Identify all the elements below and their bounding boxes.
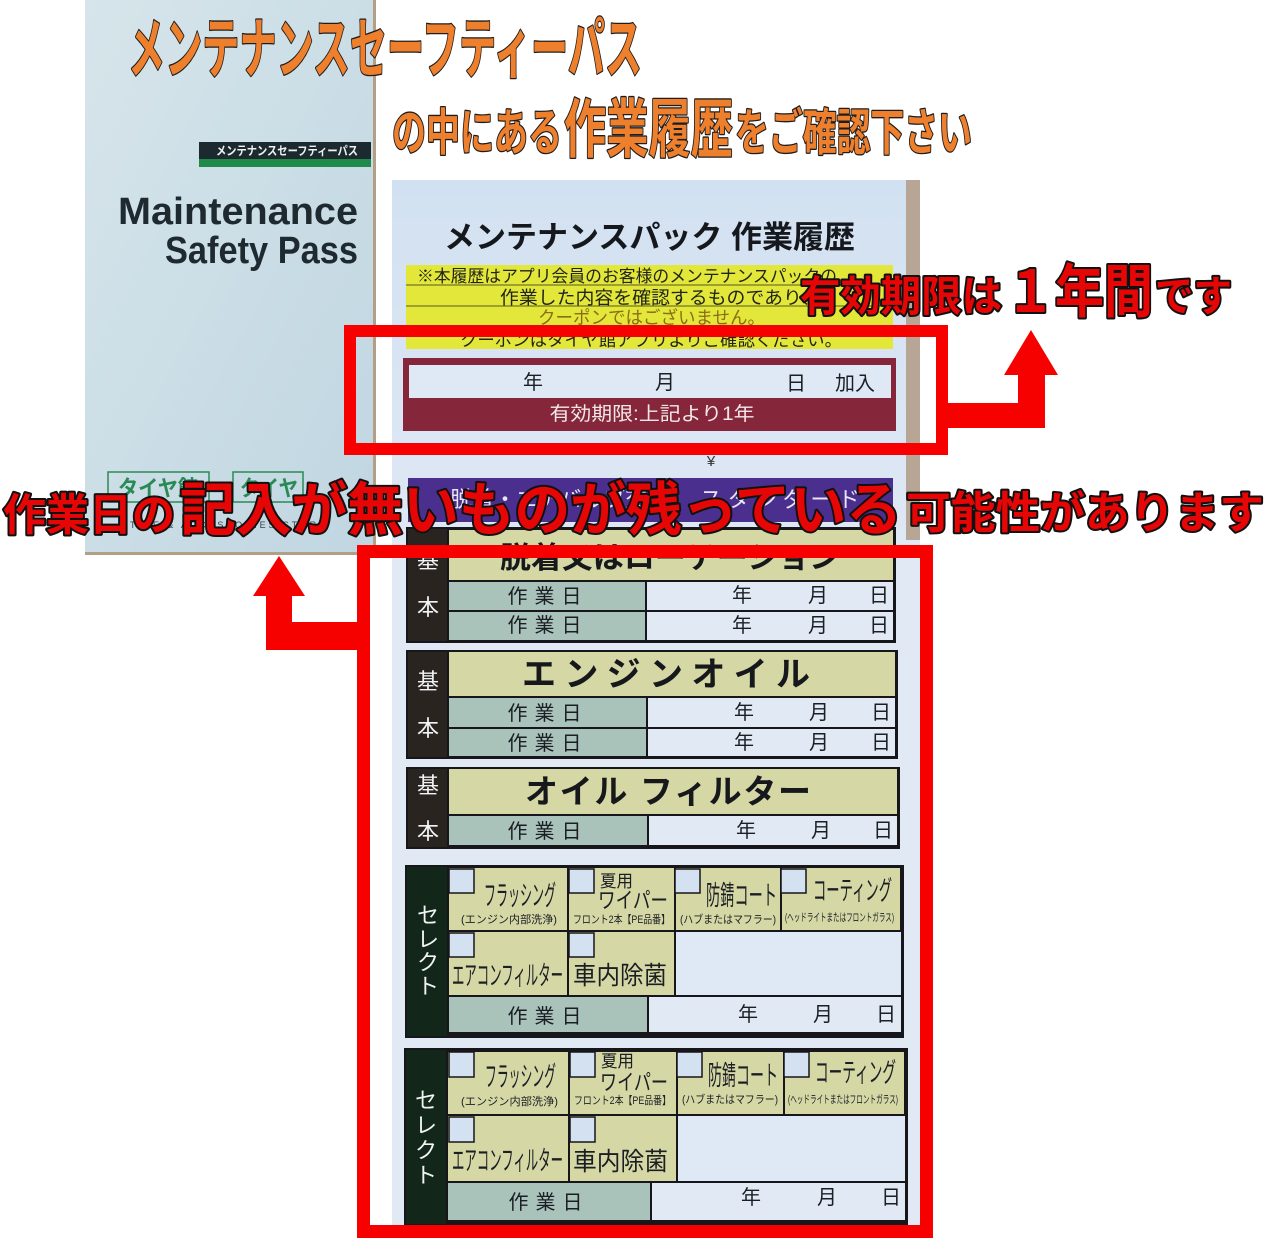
- cover title: Maintenance: [118, 191, 358, 233]
- table: tire rotation: 脱着又はローテーション: [500, 542, 840, 575]
- table: tire rotation: 日: [869, 585, 889, 607]
- panel: booklet cover: [85, 0, 376, 555]
- membership date panel: [403, 358, 896, 431]
- note: entries without a work date may remain: 記入が無いものが残っている: [180, 478, 902, 543]
- cover title: [118, 191, 358, 272]
- table: tire rotation: 月: [808, 585, 828, 607]
- yellow notice: ※本履歴はアプリ会員のお客様のメンテナンスパックの: [417, 267, 837, 286]
- arrow: expiry box to expiry note: [948, 330, 1058, 428]
- table: select items 2: 防錆コート: [708, 1061, 778, 1091]
- cover logos: タイヤ館: [118, 476, 198, 501]
- table: oil filter: 本: [417, 819, 439, 844]
- table: select items 2: (ハブまたはマフラー): [682, 1092, 778, 1106]
- note: entries without a work date may remain: [3, 478, 1264, 543]
- table: select items 1: 車内除菌: [573, 962, 667, 990]
- table: engine oil: 日: [871, 732, 891, 754]
- table: select items 1: フロント2本【PE品番】: [573, 912, 670, 926]
- table: engine oil: 月: [809, 702, 829, 724]
- table: engine oil: 基: [417, 669, 439, 694]
- yellow notice: 作業した内容を確認するものであり、: [500, 288, 820, 308]
- cover label band: [199, 142, 371, 167]
- title: line 2: の中にある: [392, 105, 562, 161]
- table: engine oil: [406, 650, 898, 759]
- table: select items 2: 月: [817, 1187, 837, 1209]
- arrow: work history box to booklet: [253, 556, 357, 650]
- table: oil filter: 作業日: [508, 820, 588, 843]
- yellow notice: [406, 265, 893, 350]
- table: select items 1: (ヘッドライトまたはフロントガラス): [785, 911, 894, 924]
- table: select items 2: [404, 1048, 908, 1226]
- note: expiry is one year: 有効期限は: [800, 273, 1002, 320]
- table: select items 1: [405, 865, 904, 1038]
- membership date panel: 加入: [835, 372, 875, 395]
- membership date panel: 年: [523, 371, 543, 394]
- callout box: work history entries: [364, 552, 926, 1232]
- table: select items 1: ワイパー: [598, 888, 668, 913]
- table: tire rotation: 年: [732, 584, 752, 607]
- table: select items 2: ク: [415, 1138, 437, 1163]
- table: select items 2: (ヘッドライトまたはフロントガラス): [788, 1093, 898, 1106]
- cover logos: TIRE & ACCESSORIES STORE: [130, 520, 325, 530]
- table: select items 2: ト: [415, 1163, 437, 1188]
- table: select items 2: (エンジン内部洗浄): [461, 1094, 558, 1108]
- table: tire rotation: 基: [417, 548, 439, 573]
- purple band: 脱着・エアバルブ交換: [450, 487, 669, 512]
- table: select items 1: レ: [417, 927, 439, 952]
- table: select items 2: エアコンフィルター: [452, 1146, 563, 1176]
- table: select items 2: フロント2本【PE品番】: [574, 1093, 671, 1107]
- membership date panel: 月: [655, 372, 675, 394]
- callout box: expiry date: [350, 331, 942, 449]
- table: tire rotation: 年: [732, 614, 752, 637]
- table: oil filter: 月: [811, 820, 831, 842]
- note: entries without a work date may remain: 作業日の: [3, 491, 175, 540]
- table: select items 1: (エンジン内部洗浄): [461, 912, 557, 926]
- table: select items 1: 夏用: [600, 872, 633, 891]
- table: select items 1: 日: [876, 1004, 896, 1026]
- table: engine oil: 作業日: [508, 702, 588, 725]
- yellow notice: クーポンではございません。: [538, 307, 765, 328]
- panel: work history sheet: [392, 180, 920, 1238]
- table: engine oil: 月: [809, 732, 829, 754]
- table: select items 2: レ: [415, 1113, 437, 1138]
- table: oil filter: [406, 767, 900, 849]
- purple band: スタンダード: [700, 487, 860, 512]
- table: select items 1: (ハブまたはマフラー): [680, 912, 776, 926]
- note: expiry is one year: １年間: [1006, 260, 1153, 325]
- note: expiry is one year: です: [1155, 273, 1232, 320]
- table: select items 2: 日: [881, 1187, 901, 1209]
- table: oil filter: 日: [873, 820, 893, 842]
- table: tire rotation: 作業日: [508, 614, 588, 637]
- table: select items 1: 年: [738, 1003, 758, 1026]
- cover title: Safety Pass: [165, 230, 358, 272]
- table: select items 1: コーティング: [813, 876, 892, 906]
- table: oil filter: 年: [736, 819, 756, 842]
- title: line 2: [392, 94, 972, 166]
- membership date panel: 有効期限:上記より1年: [550, 403, 754, 425]
- table: tire rotation: [406, 527, 896, 643]
- table: tire rotation: 日: [869, 615, 889, 637]
- table: oil filter: オイル フィルター: [525, 773, 811, 810]
- table: select items 2: コーティング: [815, 1058, 896, 1088]
- table: select items 1: セ: [417, 903, 439, 928]
- table: select items 1: エアコンフィルター: [452, 961, 563, 991]
- table: engine oil: 本: [417, 716, 439, 741]
- table: select items 2: 車内除菌: [573, 1148, 668, 1176]
- table: select items 1: 防錆コート: [706, 881, 777, 911]
- yen mark: ¥: [706, 453, 716, 470]
- table: select items 2: ワイパー: [600, 1070, 668, 1095]
- table: select items 1: ト: [417, 974, 439, 999]
- cover logos: タイヤ: [240, 476, 298, 501]
- table: select items 2: セ: [415, 1088, 437, 1113]
- table: select items 1: 作業日: [508, 1005, 588, 1028]
- title: line 2: をご確認下さい: [735, 105, 972, 161]
- table: select items 1: フラッシング: [484, 880, 556, 911]
- note: entries without a work date may remain: 可能性があります: [906, 489, 1264, 538]
- table: select items 2: 年: [741, 1186, 761, 1209]
- title: line 2: 作業履歴: [564, 94, 733, 166]
- sheet title: メンテナンスパック 作業履歴: [444, 220, 855, 255]
- table: select items 1: ク: [417, 950, 439, 975]
- table: engine oil: エンジンオイル: [522, 656, 810, 694]
- title: line 1: メンテナンスセーフティーパス: [128, 12, 642, 86]
- table: tire rotation: 作業日: [508, 585, 588, 608]
- table: oil filter: 基: [417, 773, 439, 798]
- cover label band: メンテナンスセーフティーパス: [216, 144, 358, 158]
- membership date panel: 日: [786, 373, 806, 395]
- table: engine oil: 日: [871, 702, 891, 724]
- table: engine oil: 年: [734, 701, 754, 724]
- table: tire rotation: 本: [417, 595, 439, 620]
- table: tire rotation: 月: [808, 615, 828, 637]
- table: engine oil: 年: [734, 731, 754, 754]
- table: engine oil: 作業日: [508, 732, 588, 755]
- table: select items 2: フラッシング: [485, 1061, 556, 1092]
- cover logos: [108, 472, 325, 530]
- table: select items 1: 月: [813, 1004, 833, 1026]
- purple band: [408, 478, 893, 522]
- note: expiry is one year: [800, 260, 1232, 325]
- yellow notice: クーポンはタイヤ館アプリよりご確認ください。: [460, 331, 842, 350]
- table: select items 2: 作業日: [508, 1191, 590, 1214]
- table: select items 2: 夏用: [601, 1052, 634, 1071]
